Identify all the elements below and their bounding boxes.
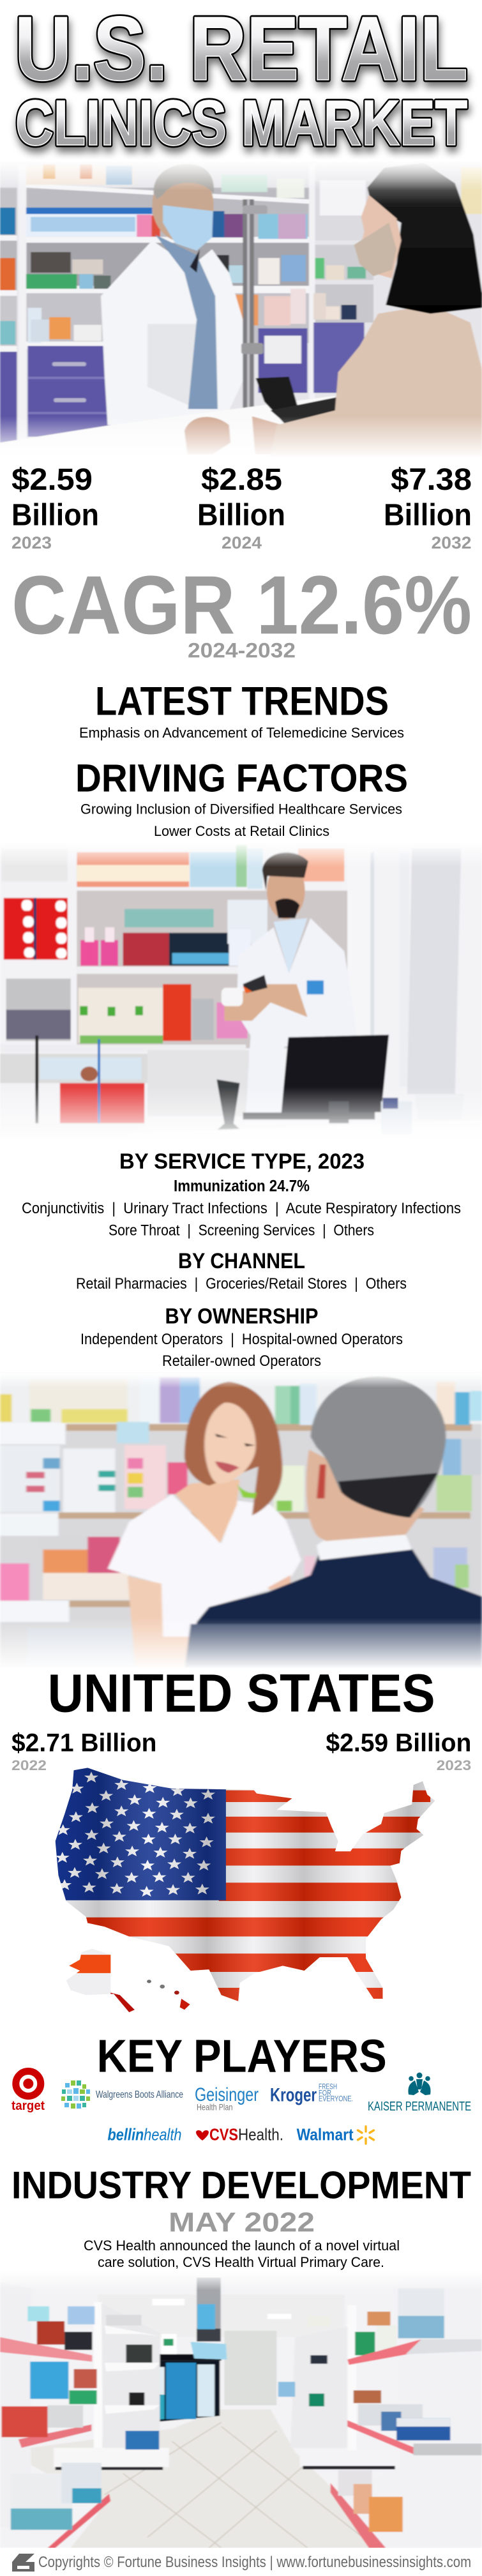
market values: 2024 xyxy=(197,462,285,552)
logo: Kroger xyxy=(270,2082,353,2106)
customer face and mask xyxy=(359,195,401,278)
logo: CVS Health: Health. xyxy=(238,2125,283,2144)
logo: Bellin Health: bellinhealth xyxy=(107,2125,181,2144)
left foreground shelves xyxy=(0,2337,92,2361)
pharmacist head xyxy=(152,169,214,242)
driving factors: Lower Costs at Retail Clinics xyxy=(154,823,329,839)
counter xyxy=(0,1120,482,1142)
key players heading: KEY PLAYERS xyxy=(97,2031,387,2082)
by service type: Sore Throat | Screening Services | Others xyxy=(109,1222,374,1239)
photo bottom fade xyxy=(0,1618,482,1670)
handshake hands xyxy=(185,417,230,455)
US value 2022 xyxy=(11,1729,157,1773)
photo bottom fade xyxy=(0,1087,482,1144)
right foreground shelves xyxy=(335,2273,482,2548)
lower shelf stock xyxy=(0,289,357,344)
logo: Kroger: FOR xyxy=(319,2088,331,2097)
market values: 2032: 2032 xyxy=(432,533,471,552)
left end shelf xyxy=(94,2302,102,2454)
left foreground wall xyxy=(0,2282,31,2548)
driving factors xyxy=(75,757,408,839)
pharmacist coat xyxy=(237,918,357,1112)
footer logo icon xyxy=(12,2554,34,2572)
customer hair xyxy=(367,163,482,314)
by channel: Retail Pharmacies | Groceries/Retail Stores | Others xyxy=(76,1275,407,1292)
by ownership: Independent Operators | Hospital-owned Operators xyxy=(80,1331,403,1348)
market values: 2032: Billion xyxy=(384,497,472,532)
monitor xyxy=(282,1034,389,1112)
top shelf products xyxy=(0,1377,482,1425)
photo top fade xyxy=(0,841,482,867)
driving factors: Growing Inclusion of Diversified Healthcare Services xyxy=(80,801,402,817)
man's hair xyxy=(310,1376,446,1518)
mainland xyxy=(52,1766,440,2005)
logo: Kroger: Kroger xyxy=(270,2085,317,2106)
logo: Kroger: EVERYONE. xyxy=(319,2095,353,2103)
by service type: Immunization 24.7% xyxy=(174,1177,310,1195)
bottles xyxy=(80,900,267,966)
center display xyxy=(129,2361,220,2425)
customer sweater xyxy=(271,305,482,457)
by service type: BY SERVICE TYPE, 2023 xyxy=(119,1149,365,1174)
logo: Walgreens Boots Alliance: Walgreens Boots Alliance xyxy=(96,2089,183,2100)
woman's face xyxy=(204,1402,256,1483)
scanner and keyboard xyxy=(256,377,303,425)
by channel xyxy=(76,1249,407,1292)
woman's body xyxy=(108,1494,301,1637)
pharmacist head and hair xyxy=(267,862,305,920)
logo: Kaiser Permanente xyxy=(368,2073,471,2114)
right end shelf xyxy=(347,2305,357,2454)
photo top fade xyxy=(0,160,482,190)
US value 2023 xyxy=(326,1729,471,1773)
date: MAY 2022 xyxy=(169,2207,315,2238)
logo: Target: target xyxy=(11,2099,45,2113)
Hawaii xyxy=(147,1980,190,2010)
mid shelf stock xyxy=(0,252,366,291)
by ownership xyxy=(80,1305,403,1370)
US value 2023: $2.59 Billion xyxy=(326,1729,471,1757)
logo: Geisinger Health Plan: Geisinger xyxy=(195,2084,259,2105)
logo: CVS Health xyxy=(196,2125,283,2144)
driving factors: DRIVING FACTORS xyxy=(75,757,408,800)
photo bottom fade xyxy=(0,416,482,458)
mid shelf products xyxy=(0,1422,482,1512)
man's jacket xyxy=(188,1549,482,1668)
logo: Kroger: FRESH xyxy=(319,2082,337,2091)
market values: 2023: Billion xyxy=(11,497,99,532)
latest trends xyxy=(79,679,404,741)
development text: CVS Health announced the launch of a novel virtual xyxy=(84,2238,400,2254)
by channel: BY CHANNEL xyxy=(178,1249,305,1273)
lower shelf stock xyxy=(6,984,248,1043)
market values: 2032: $7.38 xyxy=(391,462,472,497)
CAGR figure: 2024-2032 xyxy=(188,639,296,662)
logo: CVS Health: CVS xyxy=(209,2125,238,2144)
US value 2022: 2022 xyxy=(11,1757,47,1773)
photo top fade xyxy=(0,1373,482,1388)
lower shelf products xyxy=(0,1537,469,1667)
flag-patterned US map xyxy=(52,1766,440,2015)
logo: Walmart: Walmart xyxy=(297,2125,354,2144)
photo: pharmacist with barcode scanner xyxy=(0,841,482,1144)
footer white band xyxy=(0,2548,482,2576)
arm, hand and scanner xyxy=(224,984,308,1021)
by ownership: Retailer-owned Operators xyxy=(162,1352,321,1370)
market values: 2032 xyxy=(384,462,472,552)
development text: care solution, CVS Health Virtual Primary Care. xyxy=(98,2254,384,2270)
market values: 2024: Billion xyxy=(197,497,285,532)
US value 2022: $2.71 Billion xyxy=(11,1729,157,1757)
pharmacist coat xyxy=(101,240,243,425)
steel pole xyxy=(243,199,254,457)
top-row stock xyxy=(26,164,482,215)
logo: Geisinger Health Plan xyxy=(195,2084,259,2112)
market values: 2023: $2.59 xyxy=(11,462,93,497)
woman's neck xyxy=(175,1480,240,1543)
telephone and pens xyxy=(415,1094,464,1120)
title xyxy=(15,0,468,159)
market values: 2023 xyxy=(11,462,99,552)
counter xyxy=(0,396,335,457)
United States heading: UNITED STATES xyxy=(48,1663,435,1723)
woman's hair xyxy=(185,1381,282,1515)
floor xyxy=(31,2409,384,2548)
blue boxes row xyxy=(0,208,308,239)
by ownership: BY OWNERSHIP xyxy=(165,1305,318,1329)
man's collar and neck xyxy=(317,1534,412,1560)
glasses and red boxes xyxy=(35,1035,144,1123)
logo: Walgreens Boots Alliance xyxy=(61,2080,183,2109)
by service type xyxy=(22,1149,461,1239)
logo: Geisinger Health Plan: Health Plan xyxy=(197,2102,232,2112)
development text xyxy=(84,2238,400,2270)
market values: 2024: $2.85 xyxy=(201,462,282,497)
photo: pharmacist serving masked customer xyxy=(0,160,482,458)
logo: Target xyxy=(11,2072,45,2113)
latest trends: LATEST TRENDS xyxy=(95,679,389,724)
top stock xyxy=(1,845,344,889)
photo: pharmacy aisle xyxy=(0,2271,482,2548)
Alaska xyxy=(66,1949,135,2012)
blue shirt xyxy=(155,234,218,409)
pocket xyxy=(307,980,324,994)
photo: pharmacist woman and customer xyxy=(0,1373,482,1670)
latest trends: Emphasis on Advancement of Telemedicine Services xyxy=(79,725,404,741)
US value 2023: 2023 xyxy=(437,1757,471,1773)
market values: 2024: 2024 xyxy=(222,533,262,552)
photo top fade xyxy=(0,2271,482,2291)
market values: 2023: 2023 xyxy=(11,533,52,552)
red boxes xyxy=(4,898,68,960)
